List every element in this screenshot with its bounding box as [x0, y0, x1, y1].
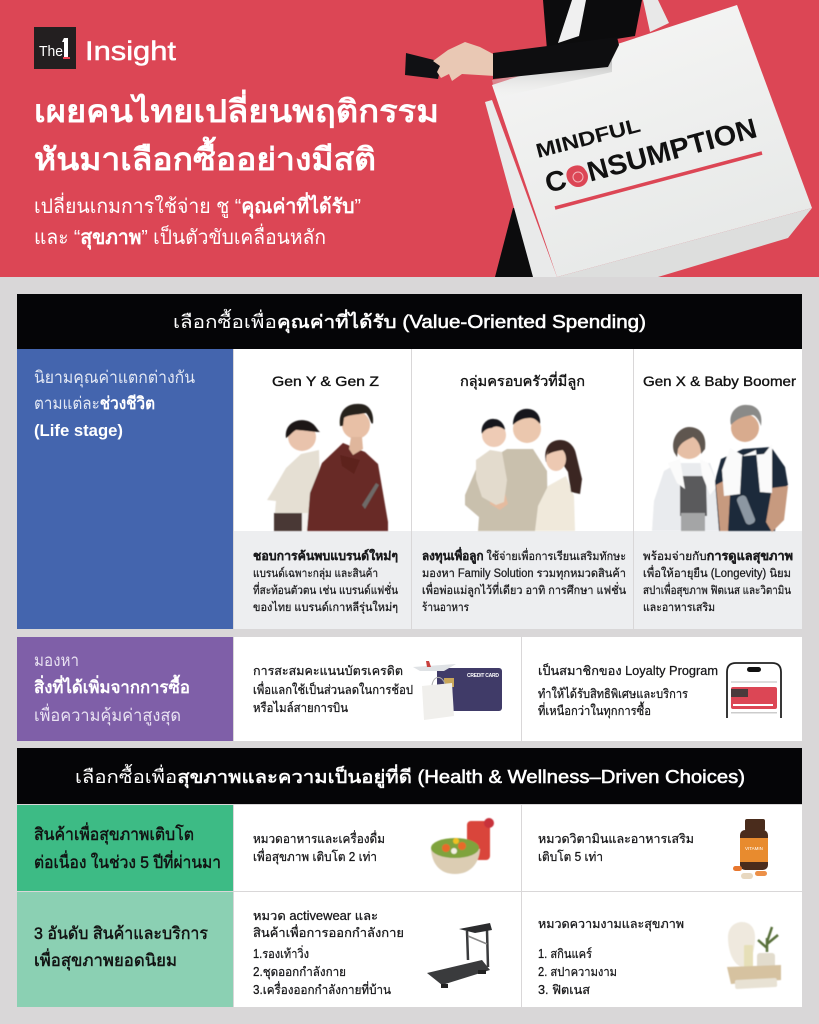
text: loyalty: ทำให้ได้รับสิทธิพิเศษและบริการ: [538, 687, 688, 701]
text: activewear: [253, 909, 404, 997]
panel: vitamins: [522, 805, 802, 891]
panel: growth over 5 years: [17, 805, 233, 891]
icon: vitamin bottle: VITAMIN: [745, 846, 763, 851]
panel: Gen Y & Gen Z: [234, 349, 411, 629]
text: beauty: หมวดความงามและสุขภาพ: [538, 917, 684, 932]
panel: beauty: [522, 892, 802, 1007]
panel: loyalty program: [522, 637, 802, 741]
description: [253, 548, 398, 614]
panel: added value: เพื่อความคุ้มค่าสูงสุด: [34, 703, 181, 726]
text: food: [253, 830, 385, 865]
panel: added value: มองหา: [34, 651, 79, 670]
description: [643, 549, 793, 614]
panel: life stage: นิยามคุณค่าแตกต่างกัน: [34, 368, 195, 388]
illustration: older couple: [652, 405, 788, 532]
subtitle: เปลี่ยนเกมการใช้จ่าย ชู “คุณค่าที่ได้รับ”: [34, 191, 361, 219]
icon: face mask and plant: [727, 922, 781, 989]
text: credit card: การสะสมคะแนนบัตรเครดิต: [253, 664, 403, 678]
illustration: shopping bag with person: [405, 0, 812, 277]
headline: เผยคนไทยเปลี่ยนพฤติกรรม: [34, 89, 439, 129]
heading: family: กลุ่มครอบครัวที่มีลูก: [460, 372, 585, 390]
panel: families with children: [412, 349, 633, 629]
panel: activewear: [234, 892, 521, 1007]
heading: Gen X: Gen X & Baby Boomer: [643, 373, 796, 389]
subtitle: และ “สุขภาพ” เป็นตัวขับเคลื่อนหลัก: [34, 223, 326, 250]
heading: value-oriented spending: เลือกซื้อเพื่อ คุณค่าที่ได้รับ (Value-Oriented Spending): [173, 309, 646, 333]
text: credit card: เพื่อแลกใช้เป็นส่วนลดในการช้อป: [253, 681, 413, 697]
panel: added value: [17, 637, 233, 741]
icon: vitamin bottle: [733, 819, 768, 879]
panel: food and drink: [234, 805, 521, 891]
panel: credit card points: [234, 637, 521, 741]
panel: top 3 health products: 3 อันดับ สินค้าและบริการ: [34, 924, 208, 943]
text: beauty: [538, 917, 684, 997]
text: activewear: 1.รองเท้าวิ่ง: [253, 945, 309, 961]
text: loyalty: เป็นสมาชิกของ Loyalty Program: [538, 663, 718, 678]
panel: top 3 health products: เพื่อสุขภาพยอดนิยม: [34, 948, 177, 971]
heading: value-oriented spending: [17, 294, 802, 349]
description: ที่สะท้อนตัวตน เช่น แบรนด์แฟชั่น: [253, 582, 398, 597]
panel: Gen X & Baby Boomer: [634, 349, 802, 629]
description: สปาเพื่อสุขภาพ ฟิตเนส และวิตามิน: [643, 582, 791, 597]
headline: หันมาเลือกซื้ออย่างมีสติ: [34, 136, 376, 177]
text: food: หมวดอาหารและเครื่องดื่ม: [253, 830, 385, 846]
icon: card, bag, plane: CREDIT CARD: [467, 673, 499, 679]
description: ของไทย แบรนด์เกาหลีรุ่นใหม่ๆ: [253, 600, 398, 614]
panel: growth over 5 years: ต่อเนื่อง ในช่วง 5 ปีที่ผ่านมา: [34, 850, 221, 872]
logo: The1: The: [39, 43, 63, 60]
text: food: เพื่อสุขภาพ เติบโต 2 เท่า: [253, 848, 377, 865]
heading: health and wellness: เลือกซื้อเพื่อ สุขภาพและความเป็นอยู่ที่ดี (Health & Wellness–Driven Choices): [75, 764, 745, 788]
text: credit card: [253, 664, 413, 715]
logo: The1: [34, 27, 76, 69]
panel: life stage: ตามแต่ละช่วงชีวิต: [34, 393, 155, 413]
icon: salad and juice: [431, 818, 494, 874]
text: vitamins: เติบโต 5 เท่า: [538, 849, 603, 864]
text: beauty: 2. สปาความงาม: [538, 965, 617, 979]
illustration: family: [465, 409, 582, 531]
description: และอาหารเสริม: [643, 601, 715, 614]
headline: [34, 89, 439, 177]
heading: Gen Y & Gen Z: Gen Y & Gen Z: [272, 373, 379, 389]
icon: treadmill: [427, 923, 492, 988]
description: พร้อมจ่ายกับการดูแลสุขภาพ: [643, 549, 793, 564]
panel: life stage: [17, 349, 233, 629]
text: credit card: หรือไมล์สายการบิน: [253, 701, 348, 715]
description: แบรนด์เฉพาะกลุ่ม และสินค้า: [253, 566, 378, 580]
icon: card, bag, plane: [413, 661, 502, 720]
text: loyalty: ที่เหนือกว่าในทุกการซื้อ: [538, 701, 651, 719]
subtitle: [34, 191, 361, 250]
illustration: shopping bag with person: CONSUMPTION: [542, 112, 760, 199]
heading: health and wellness: [17, 748, 802, 804]
panel: top 3 health products: [17, 892, 233, 1007]
text: activewear: 3.เครื่องออกกำลังกายที่บ้าน: [253, 981, 391, 997]
panel: life stage: (Life stage): [34, 421, 123, 440]
description: เพื่อให้อายุยืน (Longevity) นิยม: [643, 565, 791, 580]
description: เพื่อพ่อแม่ลูกไว้ที่เดียว อาทิ การศึกษา แฟชั่น: [422, 582, 626, 597]
hero banner: [0, 0, 819, 277]
description: [422, 547, 626, 614]
description: ลงทุนเพื่อลูก ใช้จ่ายเพื่อการเรียนเสริมทักษะ: [422, 547, 626, 564]
icon: phone app: [727, 663, 781, 718]
text: vitamins: หมวดวิตามินและอาหารเสริม: [538, 832, 694, 846]
illustration: shopping bag with person: MINDFUL: [534, 115, 643, 163]
brand: Insight: Insight: [85, 36, 177, 66]
text: loyalty: [538, 663, 718, 719]
text: activewear: หมวด activewear และ: [253, 909, 378, 923]
text: beauty: 1. สกินแคร์: [538, 947, 592, 961]
description: มองหา Family Solution รวมทุกหมวดสินค้า: [422, 567, 626, 580]
panel: growth over 5 years: สินค้าเพื่อสุขภาพเติบโต: [34, 822, 194, 845]
illustration: young couple: [267, 404, 388, 531]
text: activewear: สินค้าเพื่อการออกกำลังกาย: [253, 924, 404, 940]
panel: added value: สิ่งที่ได้เพิ่มจากการซื้อ: [34, 674, 190, 697]
description: ชอบการค้นพบแบรนด์ใหม่ๆ: [253, 548, 398, 563]
text: beauty: 3. ฟิตเนส: [538, 983, 590, 997]
description: ร้านอาหาร: [422, 601, 469, 614]
text: vitamins: [538, 832, 694, 864]
text: activewear: 2.ชุดออกกำลังกาย: [253, 965, 346, 980]
